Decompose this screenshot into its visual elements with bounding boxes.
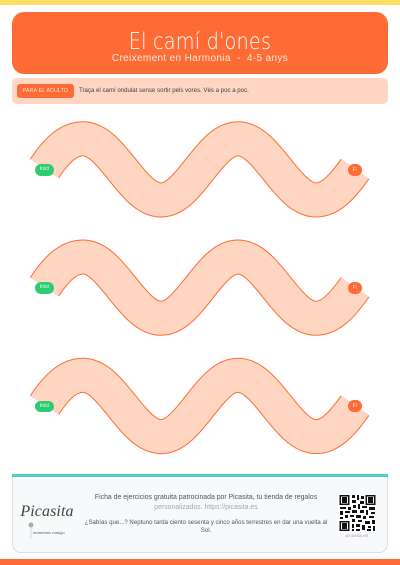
fun fact text [85, 518, 327, 534]
instruction text: Traça el camí ondulat sense sortir pels vores. Vés a poc a poc. [79, 87, 249, 94]
title: El camí d'ones [129, 29, 271, 55]
footer teal rule [12, 474, 388, 477]
end label 3: Fi [353, 403, 357, 409]
instruction panel [12, 78, 388, 104]
end label 2 [348, 282, 362, 294]
start label 1 [35, 164, 54, 176]
logo tagline: momentos contigo [33, 530, 65, 535]
end label 3 [348, 400, 362, 412]
start label 3 [35, 401, 54, 412]
sponsor text [95, 494, 317, 510]
start label 1: Inici [40, 166, 49, 172]
fun fact text: Sol. [201, 527, 211, 534]
adult badge: PARA EL ADULTO [23, 88, 68, 94]
wave path 3 [44, 375, 355, 437]
wave path 2 [44, 257, 355, 318]
start label 2 [35, 282, 54, 294]
sponsor text: personalizados. https://picasita.es [154, 504, 258, 510]
wave path 1 [44, 139, 355, 200]
end label 1: Fi [353, 166, 357, 172]
header panel [12, 12, 388, 74]
footer panel [12, 474, 388, 553]
logo dandelion icon [28, 522, 34, 539]
logo wordmark: Picasita [20, 503, 74, 520]
end label 1 [348, 164, 362, 176]
logo [20, 503, 74, 539]
top yellow band [0, 0, 400, 5]
bottom orange band [0, 559, 400, 565]
adult badge [17, 84, 74, 98]
sponsor text: Ficha de ejercicios gratuita patrocinada por Picasita, tu tienda de regalos [95, 494, 317, 501]
QR caption: picasita.es [346, 534, 368, 538]
QR code [340, 495, 376, 531]
fun fact text: ¿Sabías que...? Neptuno tarda ciento sesenta y cinco años terrestres en dar una vuelta al [85, 518, 327, 526]
subtitle: Creixement en Harmonia - 4-5 anys [112, 53, 288, 64]
start label 2: Inici [40, 284, 49, 290]
end label 2: Fi [353, 285, 357, 291]
start label 3: Inici [40, 403, 49, 409]
